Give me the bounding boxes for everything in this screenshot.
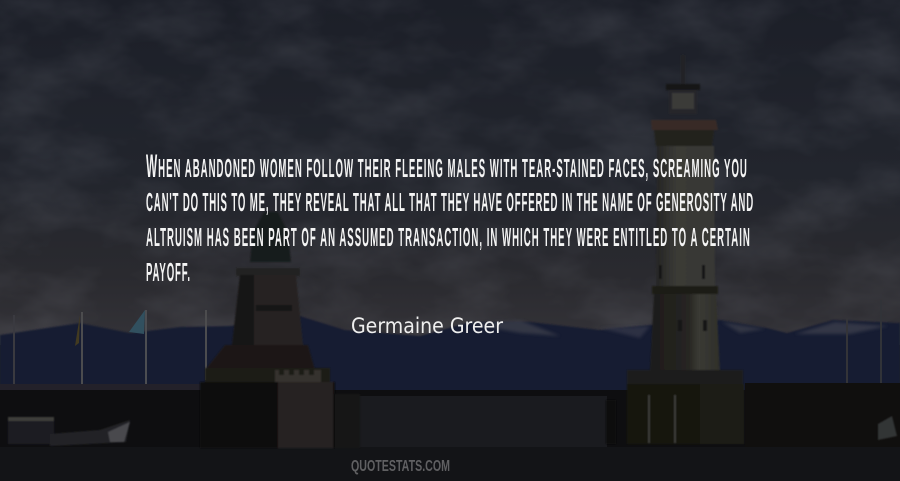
flagpoles <box>13 300 882 408</box>
quote line 1: WHEN ABANDONED WOMEN FOLLOW THEIR FLEEING MALES WITH TEAR-STAINED FACES, SCREAMING YOU <box>146 149 747 185</box>
quote text <box>146 149 753 288</box>
lion monument <box>200 212 360 448</box>
harbour wall <box>0 390 900 448</box>
quote line 3: ALTRUISM HAS BEEN PART OF AN ASSUMED TRANSACTION, IN WHICH THEY WERE ENTITLED TO A CERTAIN <box>146 223 750 253</box>
quote line 4: PAYOFF. <box>146 258 190 288</box>
quote line 2: CAN'T DO THIS TO ME, THEY REVEAL THAT ALL THAT THEY HAVE OFFERED IN THE NAME OF GENEROSITY AND <box>146 188 753 218</box>
watermark: QUOTESTATS.COM <box>351 458 450 475</box>
lighthouse <box>606 55 744 444</box>
mountains <box>0 316 900 400</box>
snow on mountains <box>470 320 888 338</box>
water <box>345 396 607 448</box>
moored boat <box>8 417 130 446</box>
sky with clouds <box>0 0 900 345</box>
author name: Germaine Greer <box>351 314 503 338</box>
distant sailboat <box>878 416 897 440</box>
